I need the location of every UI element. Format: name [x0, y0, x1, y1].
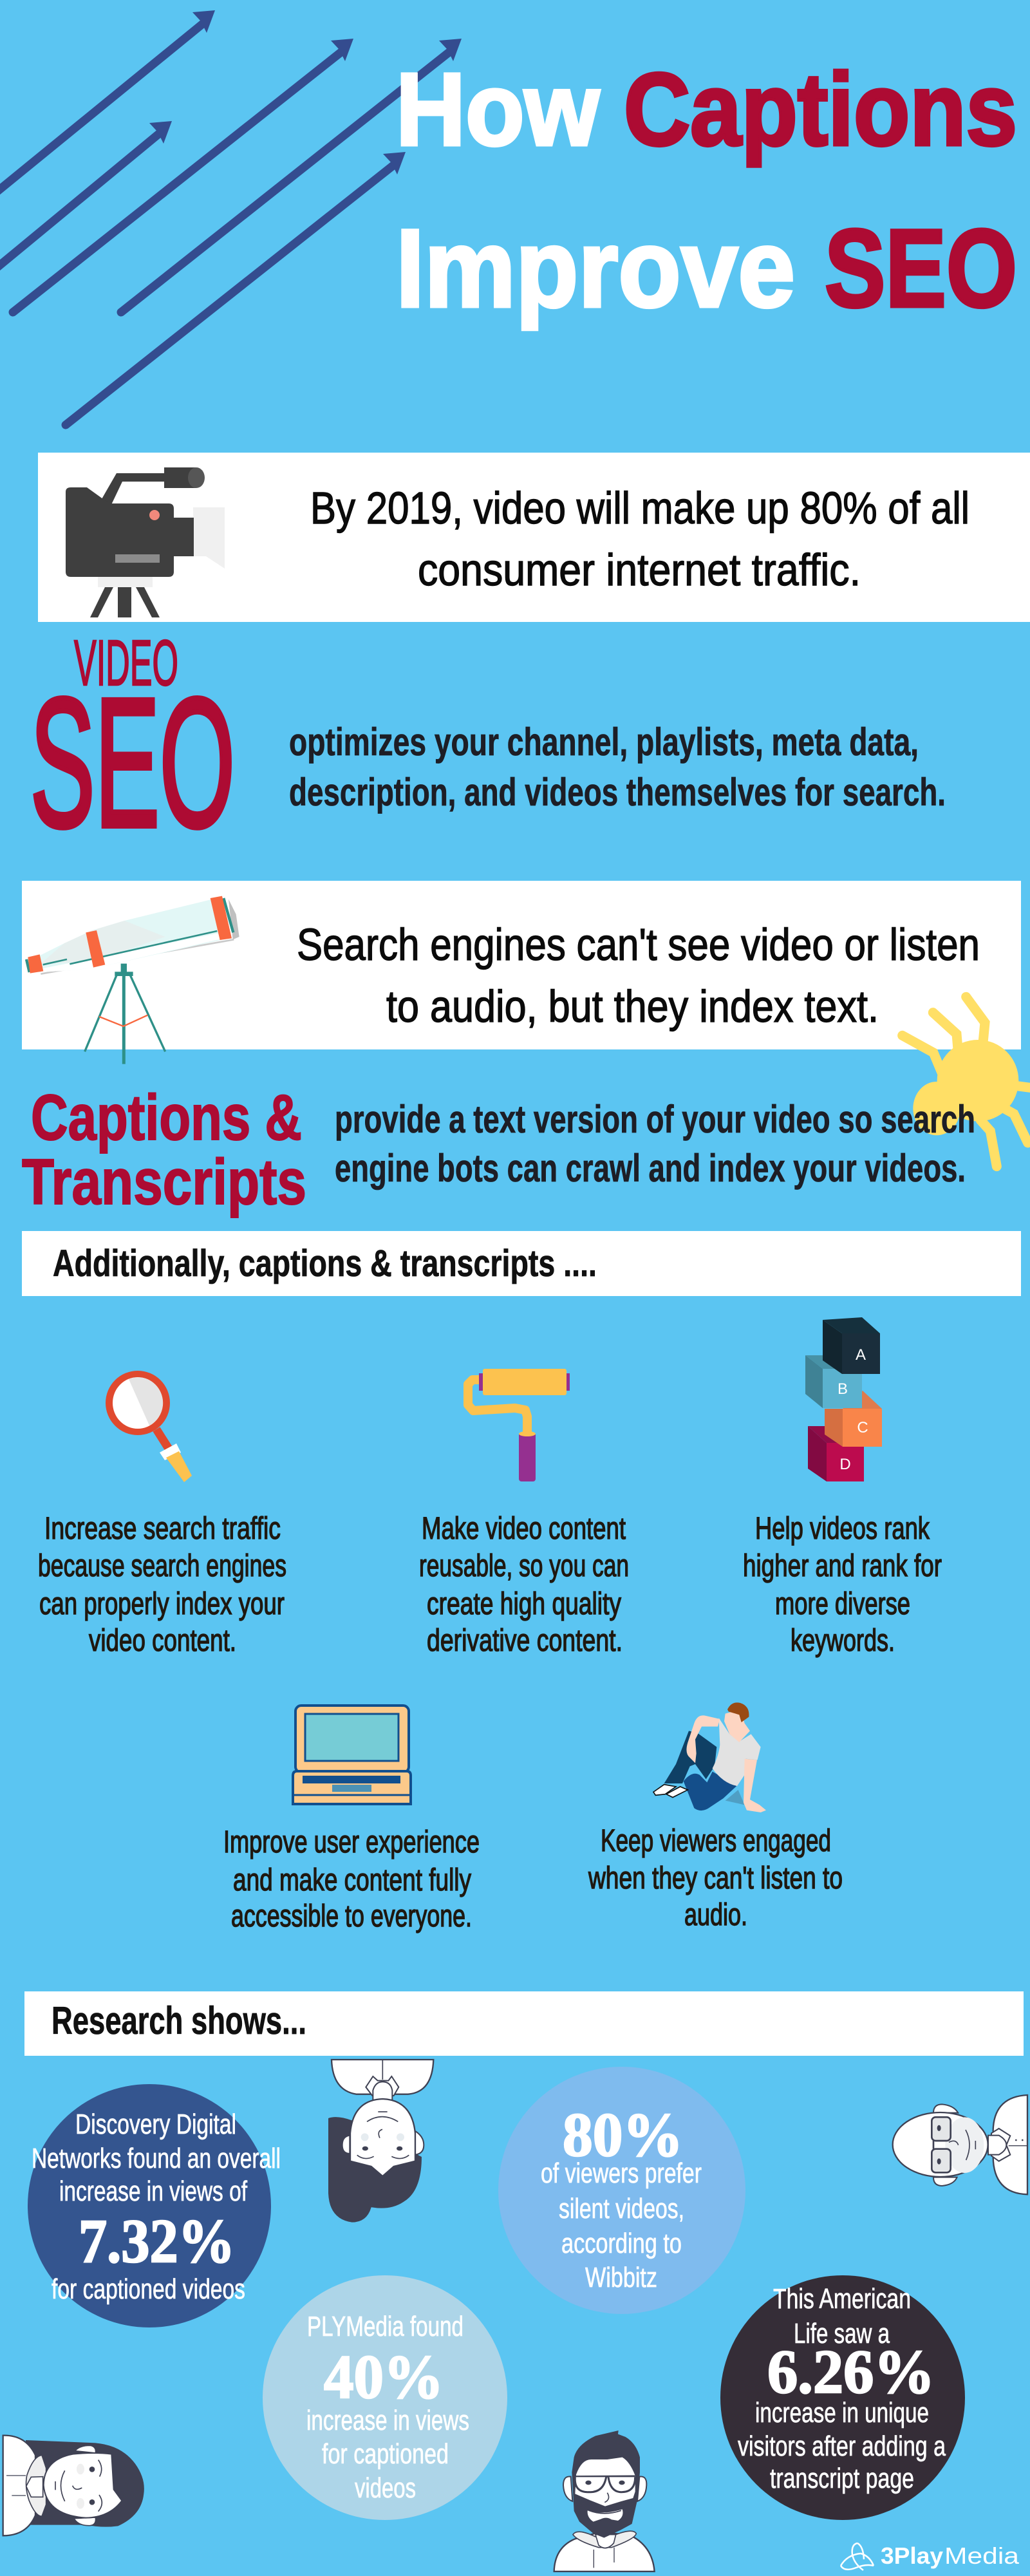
- icon: seated person: [653, 1702, 766, 1812]
- stat circle: wibbitz: Wibbitz: [585, 2262, 657, 2293]
- heading: video seo: VIDEO: [74, 627, 178, 699]
- stat circle: discovery digital: increase in views of: [59, 2176, 248, 2207]
- text: captions and transcripts description: [335, 1098, 975, 1190]
- stat circle: plymedia: 40%: [324, 2342, 444, 2411]
- search engines text: [297, 919, 980, 1031]
- logo icon: [841, 2543, 874, 2570]
- icon: paint roller: [468, 1369, 570, 1481]
- text: video seo description: [289, 720, 946, 814]
- text: viewers engaged: when they can't listen to: [588, 1861, 843, 1895]
- text: rank higher: more diverse: [775, 1587, 910, 1621]
- stat circle: wibbitz: [498, 2067, 745, 2314]
- stat circle: discovery digital: [28, 2084, 281, 2327]
- panel: additionally heading: Additionally, captions & transcripts ....: [53, 1243, 597, 1284]
- text: user experience: Improve user experience: [223, 1825, 480, 1859]
- text: increase search traffic: [38, 1512, 286, 1658]
- panel: search engines: [22, 881, 1021, 1049]
- stat circle: wibbitz: of viewers prefer: [541, 2158, 702, 2189]
- text: rank higher: Help videos rank: [755, 1512, 930, 1546]
- heading: video seo: SEO: [30, 661, 235, 865]
- icon: lettered blocks: A: [856, 1346, 866, 1364]
- stat circle: discovery digital: Networks found an overall: [32, 2143, 281, 2174]
- icon: yellow bug sun: [903, 997, 1030, 1167]
- heading: captions and transcripts: [22, 1082, 306, 1218]
- icon: lettered blocks: [805, 1317, 882, 1481]
- text: reusable content: [419, 1512, 629, 1658]
- text: rank higher: higher and rank for: [743, 1549, 942, 1583]
- stat circle: this american life: [720, 2275, 965, 2520]
- stat circle: this american life: 6.26%: [767, 2337, 935, 2406]
- text: increase search traffic: Increase search traffic: [44, 1512, 281, 1546]
- icon: lettered blocks: C: [857, 1419, 868, 1436]
- statistic text: [310, 483, 969, 595]
- icon: telescope: [26, 896, 239, 1064]
- text: viewers engaged: Keep viewers engaged: [601, 1824, 831, 1858]
- avatar: bearded man: [554, 2430, 655, 2571]
- logo: 3Play Media: 3Play: [881, 2543, 943, 2569]
- panel: research shows heading: Research shows...: [52, 1999, 306, 2042]
- stat circle: wibbitz: silent videos,: [559, 2193, 684, 2224]
- stat circle: plymedia: for captioned: [322, 2438, 449, 2470]
- avatar: man with glasses, sideways: [893, 2095, 1027, 2194]
- icon: lettered blocks: B: [838, 1380, 848, 1398]
- stat circle: discovery digital: 7.32%: [79, 2206, 235, 2275]
- stat circle: wibbitz: 80%: [563, 2100, 683, 2169]
- stat circle: discovery digital: Discovery Digital: [75, 2109, 236, 2140]
- stat circle: this american life: This American: [773, 2283, 911, 2315]
- icon: magnifying glass: [106, 1371, 192, 1482]
- logo: 3Play Media: Media: [944, 2543, 1020, 2569]
- heading: captions and transcripts: Transcripts: [22, 1146, 306, 1218]
- statistic text: consumer internet traffic.: [418, 545, 861, 595]
- text: viewers engaged: [588, 1824, 843, 1932]
- icon: video camera: [66, 467, 225, 617]
- text: user experience: [223, 1825, 480, 1933]
- text: user experience: and make content fully: [233, 1863, 471, 1897]
- text: reusable content: Make video content: [422, 1512, 626, 1546]
- stat circle: this american life: transcript page: [770, 2463, 914, 2494]
- arrow 5: [66, 152, 406, 425]
- heading: video seo: [30, 627, 235, 865]
- panel: video traffic statistic: [38, 453, 1030, 622]
- arrow 4: [121, 39, 462, 312]
- stat circle: this american life: Life saw a: [794, 2318, 890, 2349]
- text: increase search traffic: video content.: [89, 1624, 236, 1658]
- text: reusable content: reusable, so you can: [419, 1549, 629, 1583]
- icon: lettered blocks: D: [839, 1456, 851, 1473]
- avatar: sideways woman: [3, 2436, 144, 2535]
- stat circle: plymedia: videos: [355, 2472, 416, 2504]
- text: rank higher: keywords.: [791, 1624, 895, 1658]
- search engines text: to audio, but they index text.: [386, 981, 879, 1031]
- stat circle: discovery digital: for captioned videos: [52, 2273, 245, 2305]
- text: viewers engaged: audio.: [684, 1898, 747, 1932]
- title: [396, 52, 1017, 330]
- avatar: upside-down woman: [328, 2060, 433, 2223]
- title: Improve: [396, 207, 795, 330]
- heading: captions and transcripts: Captions &: [31, 1082, 302, 1154]
- text: increase search traffic: because search engines: [38, 1549, 286, 1583]
- stat circle: this american life: increase in unique: [755, 2397, 929, 2429]
- arrow 2: [0, 121, 172, 270]
- title: How: [396, 52, 600, 167]
- text: rank higher: [743, 1512, 942, 1658]
- text: reusable content: create high quality: [427, 1587, 621, 1621]
- arrow 1: [0, 10, 215, 194]
- stat circle: this american life: visitors after adding a: [738, 2430, 946, 2462]
- stat circle: plymedia: increase in views: [306, 2405, 469, 2436]
- stat circle: wibbitz: according to: [561, 2228, 682, 2259]
- logo: 3Play Media: [841, 2543, 1020, 2570]
- panel: research shows heading: [24, 1991, 1024, 2056]
- text: user experience: accessible to everyone.: [231, 1899, 472, 1933]
- stat circle: plymedia: [263, 2275, 507, 2520]
- panel: additionally heading: [22, 1231, 1021, 1296]
- text: increase search traffic: can properly index your: [39, 1587, 285, 1621]
- stat circle: plymedia: PLYMedia found: [307, 2311, 464, 2342]
- text: reusable content: derivative content.: [427, 1624, 623, 1658]
- icon: laptop: [293, 1706, 411, 1804]
- arrow 3: [13, 39, 353, 312]
